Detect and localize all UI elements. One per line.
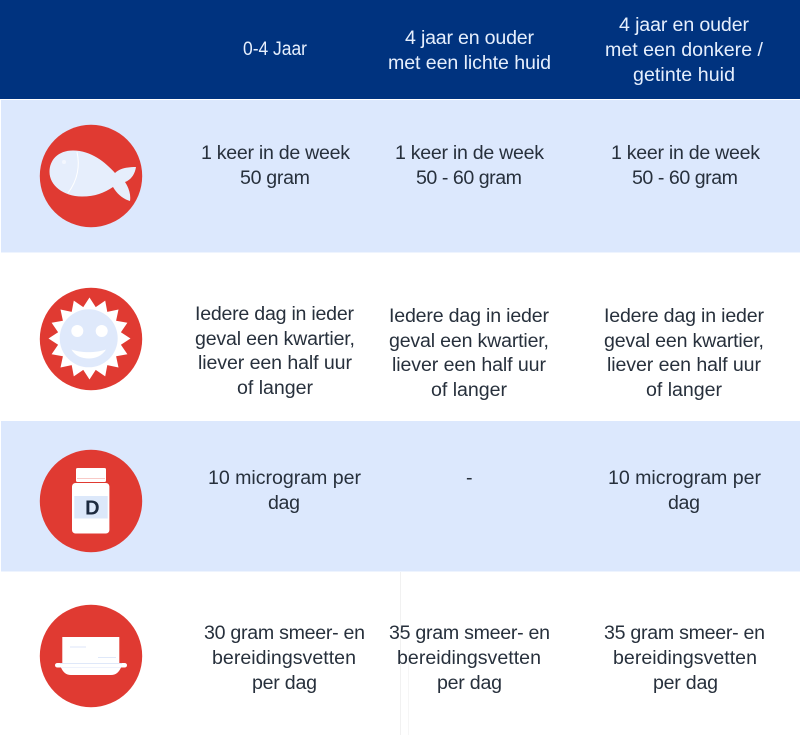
row 2 values: sunlight: of langer: [431, 379, 507, 401]
icon: vitamin D bottle: [40, 450, 142, 552]
row 2 values: sunlight: liever een half uur: [198, 352, 352, 374]
row 2 values: sunlight: geval een kwartier,: [604, 330, 764, 352]
row 4 values: fats: 35 gram smeer- en: [604, 622, 765, 644]
header: 4 jaar en ouder, donkere huid: getinte huid: [633, 64, 735, 86]
row 4 values: fats: [204, 622, 765, 694]
row 4 values: fats: bereidingsvetten: [212, 647, 356, 669]
row 2 values: sunlight: of langer: [237, 377, 313, 399]
row 4 values: fats: 35 gram smeer- en: [389, 622, 550, 644]
row 1 background: fish: [1, 100, 800, 252]
row 1 values: fish: 50 gram: [240, 167, 310, 189]
row 2 values: sunlight: liever een half uur: [392, 354, 546, 376]
row 1 values: fish: 1 keer in de week: [201, 142, 350, 164]
row 2 values: sunlight: liever een half uur: [607, 354, 761, 376]
header: 4 jaar en ouder, donkere huid: met een donkere /: [605, 39, 764, 61]
row 2 values: sunlight: geval een kwartier,: [195, 328, 355, 350]
row 1 values: fish: [201, 142, 760, 189]
row 3 values: supplement: [208, 467, 761, 514]
row 3 values: supplement: dag: [668, 492, 700, 514]
row 3 values: supplement: dag: [268, 492, 300, 514]
row 2 values: sunlight: Iedere dag in ieder: [195, 303, 354, 325]
row 1 values: fish: 50 - 60 gram: [416, 167, 522, 189]
row 3 values: supplement: -: [466, 467, 473, 489]
header band: [0, 0, 800, 99]
row 1 values: fish: 1 keer in de week: [395, 142, 544, 164]
row 4 values: fats: 30 gram smeer- en: [204, 622, 365, 644]
header: 4 jaar en ouder, donkere huid: [605, 14, 764, 86]
row 1 values: fish: 1 keer in de week: [611, 142, 760, 164]
row 4 values: fats: per dag: [437, 672, 502, 694]
header: 4 jaar en ouder, lichte huid: 4 jaar en ouder: [405, 27, 534, 49]
icon: smiling sun: [40, 288, 142, 390]
row 3 values: supplement: 10 microgram per: [608, 467, 761, 489]
header: 4 jaar en ouder, lichte huid: met een lichte huid: [388, 52, 551, 74]
header: 4 jaar en ouder, donkere huid: 4 jaar en ouder: [619, 14, 749, 36]
row 3 values: supplement: 10 microgram per: [208, 467, 361, 489]
header: 4 jaar en ouder, lichte huid: [388, 27, 551, 74]
icon: vitamin D bottle: D: [85, 498, 100, 520]
row 4 values: fats: per dag: [252, 672, 317, 694]
row 2 values: sunlight: Iedere dag in ieder: [389, 305, 549, 327]
row 2 values: sunlight: of langer: [646, 379, 722, 401]
icon: butter dish: [40, 605, 142, 707]
row 4 values: fats: bereidingsvetten: [397, 647, 541, 669]
header: 0-4 Jaar: 0-4 Jaar: [243, 38, 307, 60]
icon: fish: [40, 125, 142, 227]
row 4 values: fats: bereidingsvetten: [613, 647, 757, 669]
row 1 values: fish: 50 - 60 gram: [632, 167, 738, 189]
row 3 background: supplement: [1, 421, 800, 572]
row 4 values: fats: per dag: [653, 672, 718, 694]
row 2 values: sunlight: Iedere dag in ieder: [604, 305, 764, 327]
row 2 values: sunlight: geval een kwartier,: [389, 330, 549, 352]
row 2 values: sunlight: [195, 303, 764, 401]
